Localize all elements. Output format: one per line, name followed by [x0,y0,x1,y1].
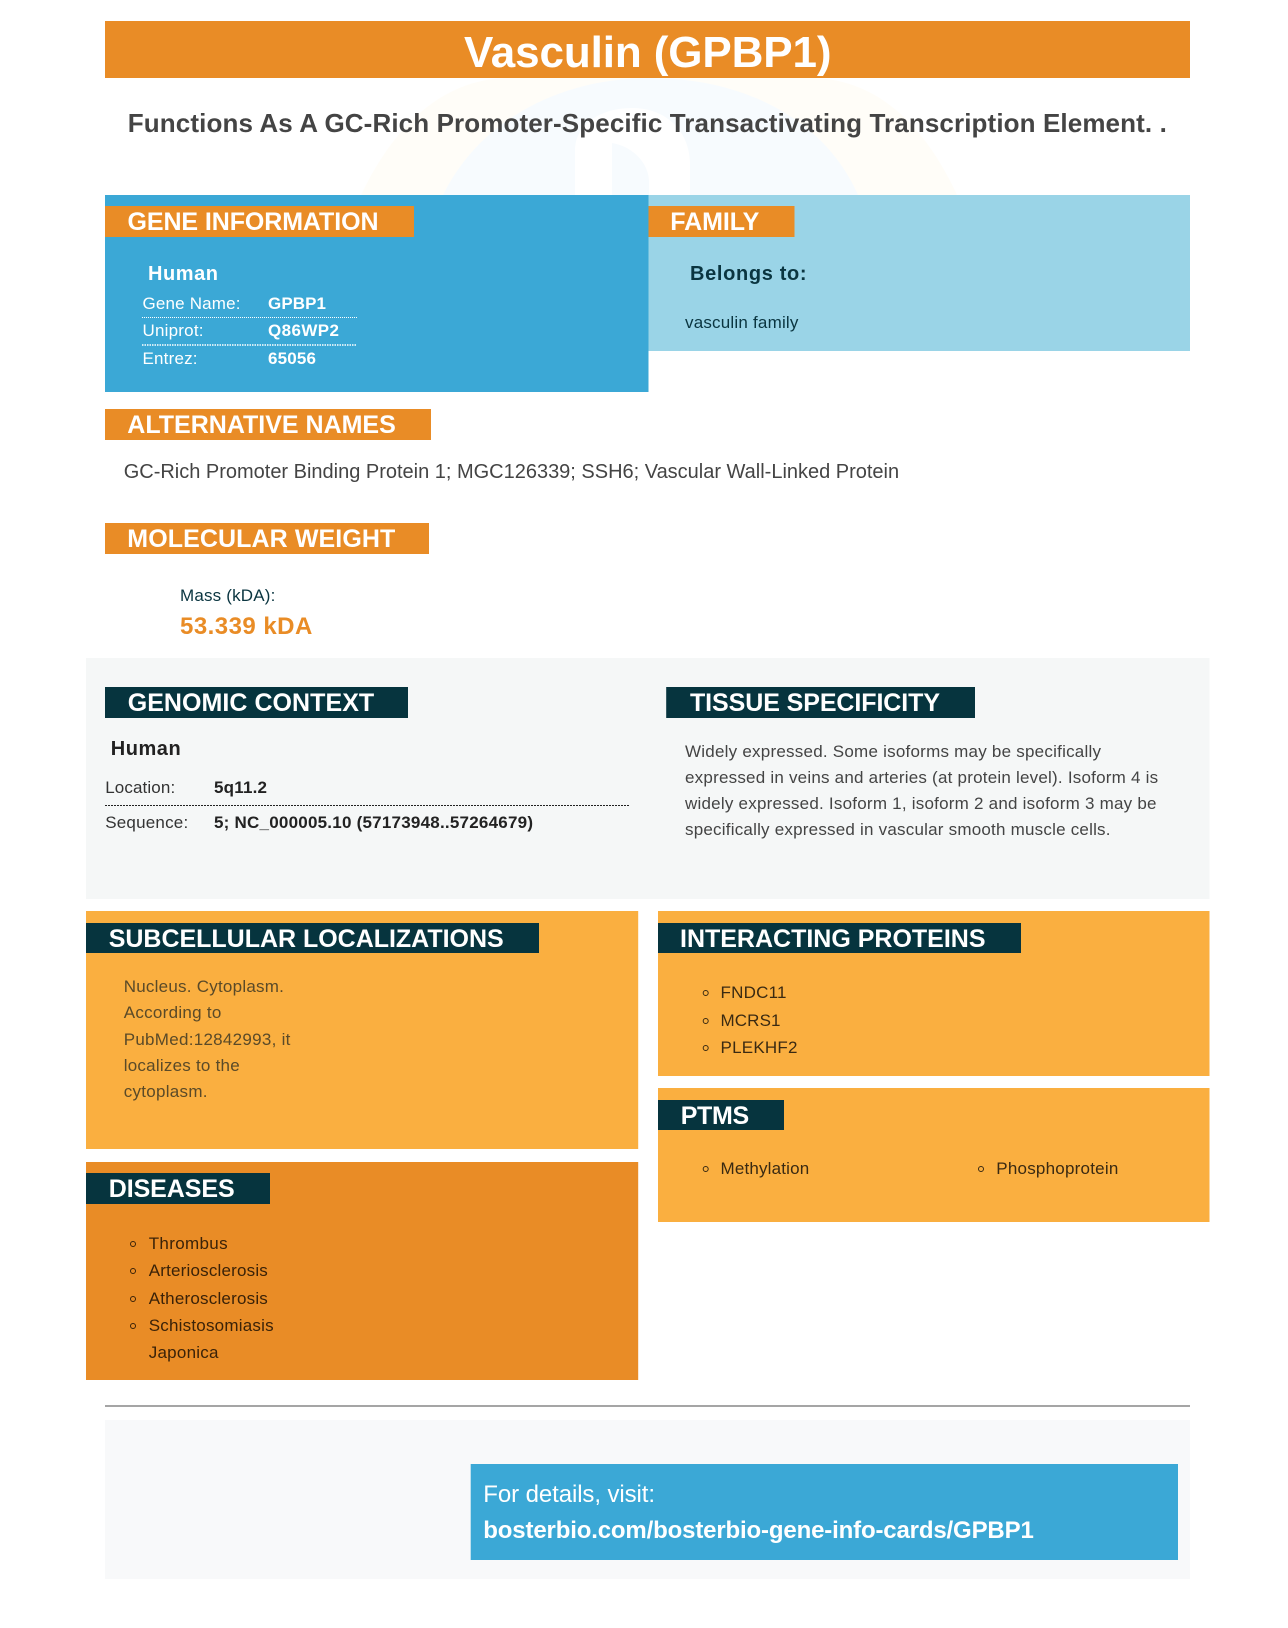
tissue specificity text: expressed in veins and arteries (at protein level). Isoform 4 is [685,768,1158,787]
genomic context table: Sequence: [105,813,188,832]
ptms list: Methylation [720,1159,809,1178]
heading: interacting proteins: INTERACTING PROTEINS [680,925,986,953]
subtitle: Functions As A GC-Rich Promoter-Specific Transactivating Transcription Element. . [128,108,1167,138]
family text [685,263,807,332]
heading: family [648,206,794,237]
mass value: 53.339 kDA [180,613,312,640]
heading: family: FAMILY [670,208,760,236]
background watermark: logo arcs [361,78,957,195]
diseases list [130,1234,274,1362]
alternative names text: GC-Rich Promoter Binding Protein 1; MGC126339; SSH6; Vascular Wall-Linked Protein [124,461,899,483]
diseases list: Arteriosclerosis [149,1261,268,1280]
gene info table: GPBP1 [268,294,326,313]
family text: vasculin family [685,313,799,332]
heading: diseases: DISEASES [109,1175,235,1203]
gene info table: Entrez: [142,349,198,368]
panel: family [648,195,1190,351]
gene info table: Q86WP2 [268,321,339,340]
subcellular text: According to [124,1003,221,1022]
interacting proteins list: PLEKHF2 [720,1038,798,1057]
footer divider [105,1405,1190,1407]
gene info table: Human [148,263,218,285]
tissue specificity text: specifically expressed in vascular smooth muscle cells. [685,820,1110,839]
section: molecular weight [105,523,429,640]
callout: details link: bosterbio.com/bosterbio-gene-info-cards/GPBP1 [483,1517,1034,1544]
heading: gene information: GENE INFORMATION [128,208,378,236]
tissue specificity text: widely expressed. Isoform 1, isoform 2 and isoform 3 may be [684,794,1156,813]
heading: tissue specificity: TISSUE SPECIFICITY [690,689,940,717]
panel: footer [105,1420,1190,1579]
heading: genomic context: GENOMIC CONTEXT [128,689,374,717]
heading: ptms: PTMS [681,1102,749,1130]
callout: details link [471,1464,1178,1560]
gene info table: Gene Name: [142,294,240,313]
heading: molecular weight: MOLECULAR WEIGHT [127,525,395,553]
panel: interacting proteins [658,911,1210,1076]
gene info table: Uniprot: [142,321,204,340]
title banner [105,21,1190,78]
genomic context table: Human [111,738,181,760]
heading: alternative names: ALTERNATIVE NAMES [127,411,396,439]
gene info table [142,263,357,368]
diseases list: Japonica [149,1343,219,1362]
mass value [180,586,312,640]
title banner: Vasculin (GPBP1) [464,28,832,77]
panel: genomic context and tissue specificity [86,658,1210,899]
mass value: Mass (kDA): [180,586,275,605]
heading: subcellular localizations: SUBCELLULAR LOCALIZATIONS [109,925,504,953]
interacting proteins list [703,983,798,1057]
callout: details link: For details, visit: [483,1481,655,1508]
diseases list: Atherosclerosis [149,1289,268,1308]
ptms list [703,1159,1118,1178]
diseases list: Thrombus [149,1234,228,1253]
subcellular text [124,977,291,1101]
genomic context table: 5q11.2 [214,778,267,797]
family text: Belongs to: [690,263,807,285]
section: alternative names [105,409,899,483]
gene info table: 65056 [268,349,316,368]
genomic context table [105,738,629,832]
subcellular text: localizes to the [124,1056,240,1075]
heading: diseases [86,1173,270,1204]
panel: ptms [658,1088,1210,1222]
interacting proteins list: FNDC11 [720,983,786,1002]
subcellular text: cytoplasm. [124,1082,208,1101]
panel: subcellular localizations [86,911,638,1149]
ptms list: Phosphoprotein [996,1159,1118,1178]
subcellular text: Nucleus. Cytoplasm. [124,977,284,996]
genomic context table: Location: [105,778,175,797]
panel: gene information [105,195,648,392]
tissue specificity text: Widely expressed. Some isoforms may be specifically [685,742,1102,761]
heading: ptms [658,1100,784,1130]
subcellular text: PubMed:12842993, it [124,1030,291,1049]
tissue specificity text [684,742,1158,839]
genomic context table: 5; NC_000005.10 (57173948..57264679) [214,813,533,832]
panel: diseases [86,1162,638,1380]
diseases list: Schistosomiasis [149,1316,274,1335]
interacting proteins list: MCRS1 [720,1011,780,1030]
